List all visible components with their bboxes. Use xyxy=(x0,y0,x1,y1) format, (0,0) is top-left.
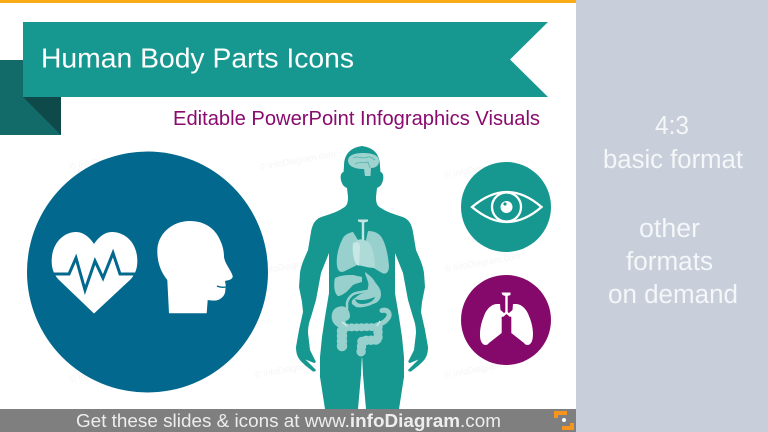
organ: heart xyxy=(353,239,375,268)
title: Human Body Parts Icons xyxy=(41,42,354,74)
organ: brain xyxy=(348,153,379,176)
side panel text: other xyxy=(639,215,701,243)
organs: lungs and trachea xyxy=(337,220,389,274)
organ: stomach xyxy=(347,272,381,309)
icon: heart with pulse xyxy=(50,232,140,314)
text: © infoDiagram.com xyxy=(444,357,521,380)
side panel text xyxy=(603,112,743,309)
footer text: Get these slides & icons at www. infoDiagram .com xyxy=(76,411,501,431)
side panel text: basic format xyxy=(603,146,743,174)
title ribbon xyxy=(0,22,548,135)
top accent bar xyxy=(0,0,576,3)
organ: liver xyxy=(334,275,362,296)
footer bar xyxy=(0,409,576,432)
text: © infoDiagram.com xyxy=(444,251,521,274)
icon: head profile xyxy=(157,221,233,313)
text: © infoDiagram.com xyxy=(444,157,521,180)
text: © infoDiagram.com xyxy=(254,357,331,380)
body silhouette xyxy=(296,146,428,409)
lungs icon circle xyxy=(461,275,551,365)
text: © infoDiagram.com xyxy=(69,361,146,384)
big circle with heart and head icons xyxy=(27,152,268,392)
side panel text: formats xyxy=(626,248,713,276)
side panel text: 4:3 xyxy=(655,112,689,140)
eye icon circle xyxy=(461,162,551,252)
subtitle: Editable PowerPoint Infographics Visuals xyxy=(173,108,540,130)
text: © infoDiagram.com xyxy=(254,254,331,277)
side panel xyxy=(576,0,768,432)
text: © infoDiagram.com xyxy=(259,149,336,172)
text: © infoDiagram.com xyxy=(69,149,146,172)
organ: intestines xyxy=(337,310,389,353)
side panel text: on demand xyxy=(608,281,738,309)
icon: logo mark xyxy=(554,411,574,430)
